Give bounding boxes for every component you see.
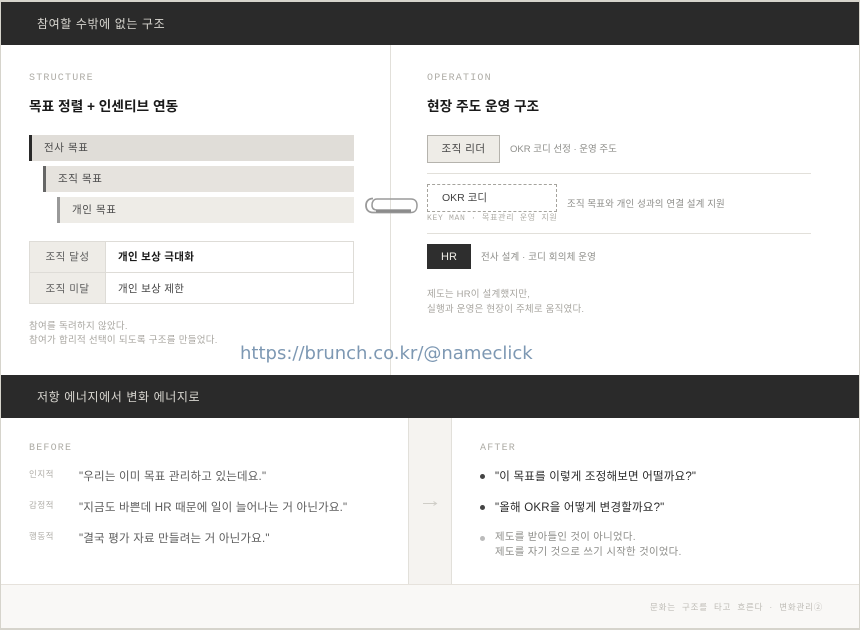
conclusion text: 제도를 받아들인 것이 아니었다. xyxy=(495,532,636,543)
panel: operation xyxy=(427,73,811,314)
key man caption: KEY MAN · 목표관리 운영 지원 xyxy=(427,214,558,223)
note: participation xyxy=(29,320,218,346)
panel: structure xyxy=(29,73,354,346)
note: participation: 참여가 합리적 선택이 되도록 구조를 만들었다. xyxy=(29,335,218,346)
cognitive row xyxy=(29,469,266,483)
label: operation: OPERATION xyxy=(427,73,492,84)
behavioral row xyxy=(29,531,270,545)
heading: goal alignment: 목표 정렬 + 인센티브 연동 xyxy=(29,99,178,114)
panel divider xyxy=(390,45,391,375)
goal bar: company: 전사 목표 xyxy=(44,142,89,154)
quote: "이 목표를 이렇게 조정해보면 어떨까요?" xyxy=(495,471,696,483)
quote: cognitive: "우리는 이미 목표 관리하고 있는데요." xyxy=(79,471,266,483)
role description: leader: OKR 코디 선정 · 운영 주도 xyxy=(510,144,617,155)
role: organization leader xyxy=(427,135,500,163)
icon: arrow xyxy=(423,501,438,506)
conclusion text xyxy=(495,531,682,558)
row divider xyxy=(427,233,811,234)
footer caption: 문화는 구조를 타고 흐른다 · 변화관리② xyxy=(650,602,823,612)
row label: missed xyxy=(30,273,106,303)
note: operation: 제도는 HR이 설계했지만, xyxy=(427,289,530,300)
role: organization leader: 조직 리더 xyxy=(441,143,486,155)
row value: achieved: 개인 보상 극대화 xyxy=(118,251,194,263)
row value: missed: 개인 보상 제한 xyxy=(118,283,184,295)
goal bar: organization xyxy=(43,166,354,192)
goal bar: company xyxy=(29,135,354,161)
quote: emotional: "지금도 바쁜데 HR 때문에 일이 늘어나는 거 아닌가요." xyxy=(79,502,347,514)
goal bar: organization: 조직 목표 xyxy=(58,173,103,185)
role: OKR coordinator xyxy=(427,184,557,212)
role: OKR coordinator: OKR 코디 xyxy=(442,192,487,204)
header: structure section xyxy=(1,2,859,45)
panel: after xyxy=(480,443,696,558)
note: operation xyxy=(427,288,584,314)
role description: coordinator: 조직 목표와 개인 성과의 연결 설계 지원 xyxy=(567,199,725,210)
row label: missed: 조직 미달 xyxy=(45,283,90,295)
conclusion text: 제도를 자기 것으로 쓰기 시작한 것이었다. xyxy=(495,547,682,558)
panel: transition arrow xyxy=(408,418,452,584)
header: energy section xyxy=(1,375,859,418)
bullet 2 xyxy=(480,501,664,514)
row value: achieved xyxy=(106,242,353,273)
row divider xyxy=(427,173,811,174)
label: after: AFTER xyxy=(480,443,516,454)
row label: achieved: 조직 달성 xyxy=(45,251,90,263)
tag: emotional: 감정적 xyxy=(29,500,54,510)
heading: field-led operation: 현장 주도 운영 구조 xyxy=(427,99,539,114)
tag: behavioral: 행동적 xyxy=(29,531,54,541)
role description: HR: 전사 설계 · 코디 회의체 운영 xyxy=(481,252,596,263)
role: HR: HR xyxy=(441,251,457,263)
label: structure: STRUCTURE xyxy=(29,73,94,84)
header: energy section: 저항 에너지에서 변화 에너지로 xyxy=(37,390,200,404)
emotional row xyxy=(29,500,347,514)
panel: before xyxy=(29,443,347,545)
role: HR xyxy=(427,244,471,269)
footer xyxy=(1,584,859,628)
label: before: BEFORE xyxy=(29,443,72,454)
bullet 3 xyxy=(480,531,682,558)
row label: achieved xyxy=(30,242,106,273)
dot xyxy=(480,536,485,541)
dot xyxy=(480,505,485,510)
icon: paperclip xyxy=(365,198,418,214)
note: participation: 참여를 독려하지 않았다. xyxy=(29,321,128,332)
tag: cognitive: 인지적 xyxy=(29,469,54,479)
bullet 1 xyxy=(480,470,696,483)
dot xyxy=(480,474,485,479)
header: structure section: 참여할 수밖에 없는 구조 xyxy=(37,17,165,31)
quote: "올해 OKR을 어떻게 변경할까요?" xyxy=(495,502,664,514)
watermark url: https://brunch.co.kr/@nameclick xyxy=(240,343,533,364)
quote: behavioral: "결국 평가 자료 만들려는 거 아닌가요." xyxy=(79,533,270,545)
reward table xyxy=(29,241,354,304)
note: operation: 실행과 운영은 현장이 주체로 움직였다. xyxy=(427,304,584,314)
goal bar: individual xyxy=(57,197,354,223)
goal bar: individual: 개인 목표 xyxy=(72,204,117,216)
